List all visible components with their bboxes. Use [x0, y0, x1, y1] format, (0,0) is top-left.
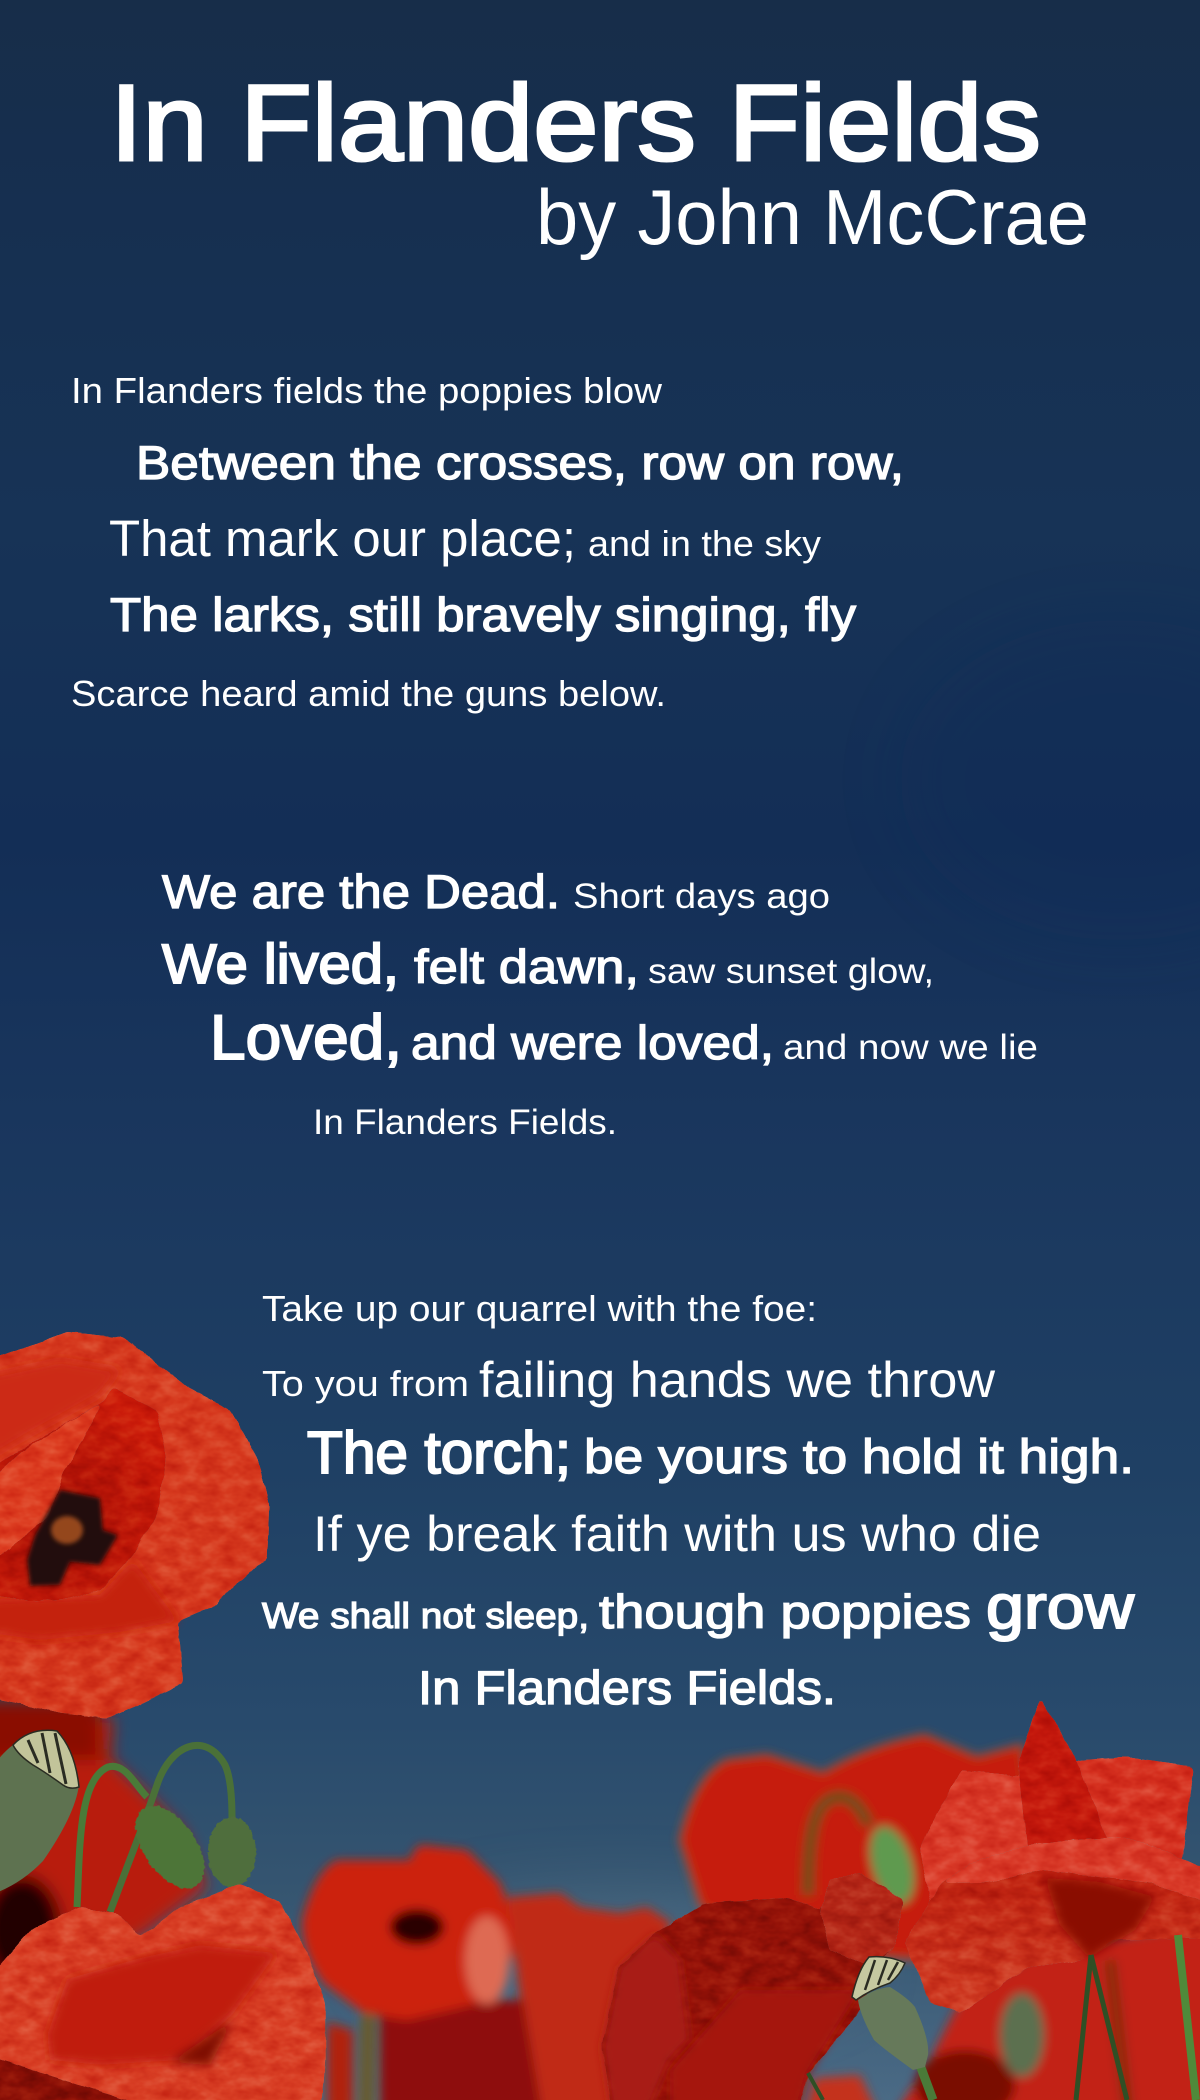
front petal	[905, 1837, 1200, 2013]
stanza 3: In Flanders Fields.	[418, 1661, 836, 1714]
stanza 3: We shall not sleep,	[262, 1595, 589, 1636]
stanza 2	[162, 865, 1038, 1142]
poppy: dark front flower, centre	[602, 1872, 903, 2100]
stanza 3: The torch;	[307, 1420, 571, 1486]
stanza 2: Loved,	[210, 1003, 402, 1073]
poppy: large open flower, top left	[0, 1332, 269, 1718]
blurred poppy, centre left	[302, 1845, 672, 2100]
petal cup	[0, 1387, 166, 1601]
blurred poppy, centre right, with stem and bud	[680, 1735, 1040, 1960]
blurred poppies, bottom right	[800, 1920, 1200, 2100]
stanza 1: The larks, still bravely singing, fly	[110, 588, 857, 641]
stanza 3	[262, 1288, 1134, 1714]
stanza 1: In Flanders fields the poppies blow	[71, 370, 663, 411]
seed pod, centre	[808, 1957, 933, 2100]
stanza 2: We lived,	[162, 932, 399, 995]
back petals	[920, 1770, 1060, 1907]
stanza 2: felt dawn,	[414, 940, 639, 993]
stanza 2: Short days ago	[573, 877, 830, 916]
blurred background poppies	[0, 1700, 1200, 2100]
stanza 2: and now we lie	[783, 1028, 1038, 1067]
subtitle: by John McCrae: by John McCrae	[536, 173, 1089, 261]
stanza 3: grow	[986, 1573, 1134, 1642]
stanza 3: be yours to hold it high.	[584, 1431, 1134, 1484]
stems and buds, left	[77, 1745, 256, 1912]
spike petal	[1018, 1698, 1110, 1850]
stanza 1: Scarce heard amid the guns below.	[71, 673, 666, 714]
stanza 1: and in the sky	[588, 523, 821, 564]
stanza 3: Take up our quarrel with the foe:	[262, 1288, 817, 1329]
stanza 3: To you from	[262, 1363, 469, 1404]
stanza 3: failing hands we throw	[479, 1352, 996, 1408]
stanza 1	[71, 370, 904, 714]
seed pod, left	[0, 1730, 79, 1895]
stanza 3: If ye break faith with us who die	[313, 1506, 1041, 1562]
blurred poppy behind stems, left	[0, 1700, 207, 2000]
stanza 3: though poppies	[599, 1585, 971, 1638]
poppy: tall flower, right	[905, 1698, 1200, 2013]
stanza 2: saw sunset glow,	[648, 952, 934, 991]
stanza 2: We are the Dead.	[162, 865, 560, 918]
stamens	[27, 1490, 118, 1586]
stanza 1: Between the crosses, row on row,	[136, 436, 904, 489]
stems, right	[1076, 1935, 1196, 2100]
left petal	[0, 1402, 103, 1580]
title: In Flanders Fields	[110, 62, 1041, 183]
poppy: bottom left flower	[0, 1884, 325, 2100]
stanza 1: That mark our place;	[109, 510, 576, 567]
stanza 2: and were loved,	[411, 1016, 774, 1069]
stanza 2: In Flanders Fields.	[313, 1103, 617, 1142]
